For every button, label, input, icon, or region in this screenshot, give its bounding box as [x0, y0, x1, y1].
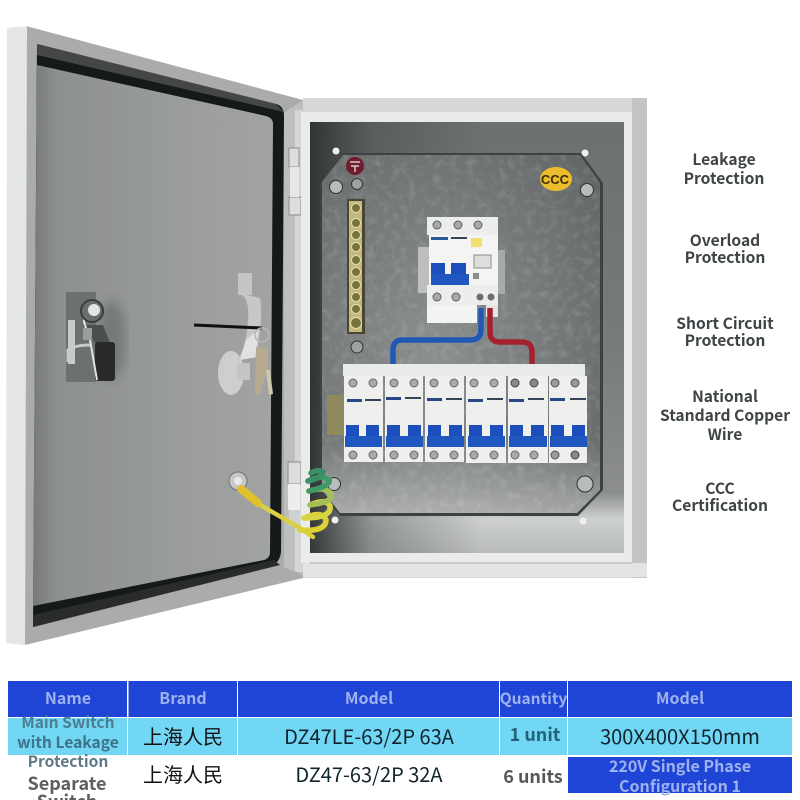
CCC badge: CCC — [541, 172, 570, 187]
earth symbol — [346, 157, 364, 175]
door inner panel — [33, 65, 273, 606]
table header: Model — [345, 685, 393, 709]
table header — [8, 681, 792, 717]
table row 1: DZ47LE-63/2P 63A — [284, 721, 455, 750]
label: CCC certification: CCC — [705, 477, 735, 499]
enclosure body — [301, 98, 647, 578]
table row 1 — [8, 711, 792, 755]
table header: Brand — [159, 685, 207, 709]
label: leakage protection: Protection — [684, 167, 764, 189]
configuration cell: Configuration 1 — [619, 773, 741, 797]
white frame — [301, 112, 632, 563]
door rubber gasket — [33, 44, 284, 627]
table row 2: 上海人民 — [143, 764, 223, 787]
door left edge — [6, 26, 27, 645]
din rail — [327, 395, 345, 435]
table row 1: 300X400X150mm — [600, 721, 760, 750]
breaker 2 — [385, 376, 423, 462]
configuration cell: 220V Single Phase — [609, 753, 751, 777]
breaker 1 — [344, 376, 383, 462]
table row 1: with Leakage — [17, 731, 119, 753]
label: CCC certification: Certification — [672, 494, 768, 516]
lower hinge — [288, 462, 301, 526]
breaker 6 — [549, 376, 587, 463]
table row 1: 上海人民 — [143, 726, 223, 749]
mounting holes — [332, 148, 588, 524]
table row 2: DZ47-63/2P 32A — [295, 759, 443, 788]
coiled earth wire — [241, 471, 331, 537]
specification table — [8, 681, 792, 800]
table row 2: 6 units — [503, 763, 563, 789]
upper hinge — [289, 148, 301, 215]
label: leakage protection: Leakage — [692, 148, 756, 170]
red wire — [490, 308, 532, 365]
table row 1: Main Switch — [21, 711, 115, 733]
table header: Quantity — [500, 687, 567, 709]
table row 2 — [28, 750, 563, 800]
table row 1: 1 unit — [510, 721, 561, 747]
table row 2: Protection — [28, 750, 108, 772]
configuration cell — [568, 753, 792, 797]
top strip — [343, 364, 585, 376]
blue wire — [393, 308, 481, 365]
label: copper wire: Standard Copper — [660, 404, 790, 426]
door lock — [66, 292, 126, 382]
door bracket with cable tie and keys — [194, 273, 273, 395]
breaker 5 — [508, 376, 548, 463]
table header: Model — [656, 685, 704, 709]
mounting plate — [320, 153, 603, 516]
interior — [310, 122, 624, 553]
lower lip — [303, 563, 647, 577]
CCC badge — [540, 167, 572, 191]
label: copper wire: Wire — [708, 423, 742, 445]
feature labels — [660, 148, 790, 516]
hinge strip — [284, 100, 303, 575]
breaker 4 — [466, 376, 506, 463]
label: short circuit protection: Protection — [685, 329, 765, 351]
breaker 3 — [425, 376, 464, 462]
label: copper wire: National — [692, 385, 758, 407]
earth bar — [347, 178, 365, 353]
screws — [328, 180, 594, 492]
label: short circuit protection: Short Circuit — [676, 312, 774, 334]
main breaker — [418, 217, 505, 323]
outer body — [303, 98, 647, 578]
table header: Name — [45, 685, 91, 709]
earth stud — [229, 472, 247, 490]
label: overload protection: Protection — [685, 246, 765, 268]
label: overload protection: Overload — [690, 229, 760, 251]
breaker row — [343, 364, 587, 463]
door flange — [25, 26, 303, 645]
open door — [6, 26, 303, 645]
table row 2: Separate — [28, 770, 106, 796]
